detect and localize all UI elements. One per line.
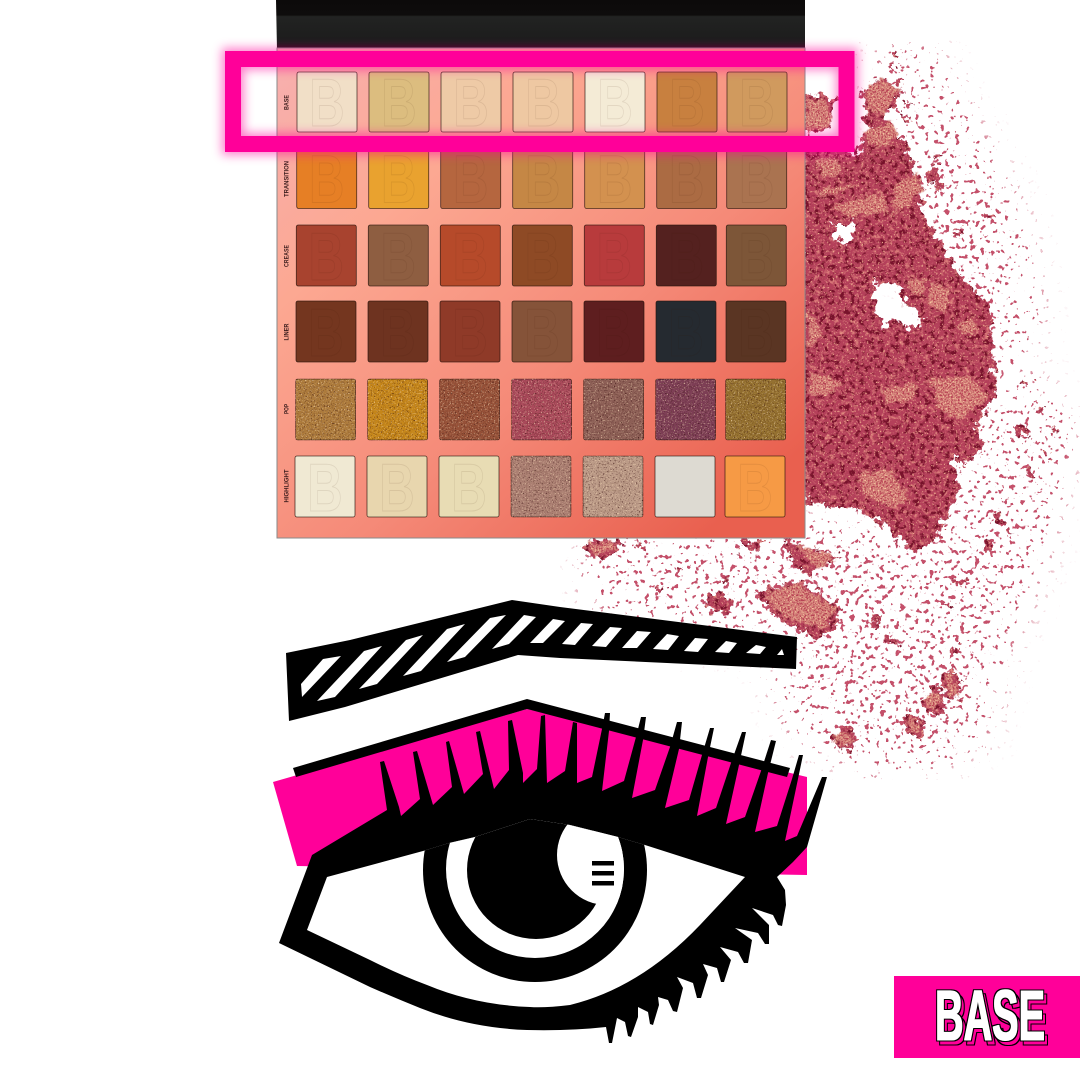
swatch row: highlight: B xyxy=(451,449,487,526)
swatch row: transition: B xyxy=(739,141,774,217)
row label: liner: LINER xyxy=(284,323,290,340)
swatch row: highlight: B xyxy=(737,449,773,526)
eye illustration xyxy=(273,699,827,1043)
row label: pop: POP xyxy=(284,404,290,414)
palette lid xyxy=(276,0,805,50)
swatch row: transition xyxy=(297,141,787,217)
row label: crease: CREASE xyxy=(284,244,290,267)
swatch row: base: B xyxy=(381,64,417,141)
swatch row: pop: B xyxy=(668,372,703,449)
swatch row: crease: B xyxy=(739,218,774,295)
swatch row: liner xyxy=(296,294,786,371)
swatch row: crease: B xyxy=(453,218,488,295)
swatch row: highlight: B xyxy=(379,449,415,526)
swatch row: pop: B xyxy=(738,372,773,449)
swatch row: crease: B xyxy=(597,218,632,295)
three-line catchlight xyxy=(592,861,614,886)
shiny powder shards xyxy=(588,78,990,746)
swatch row: pop: B xyxy=(380,372,415,449)
swatch row: transition: B xyxy=(381,141,416,217)
row label: highlight: HIGHLIGHT xyxy=(284,469,290,502)
neon highlight frame around base row xyxy=(233,59,847,144)
swatch row: base: B xyxy=(739,64,775,141)
swatch row: liner: B xyxy=(738,294,774,371)
swatch row: highlight: B xyxy=(307,449,343,526)
row label: transition: TRANSITION xyxy=(284,161,290,197)
swatch row: transition: B xyxy=(525,141,560,217)
swatch row: crease: B xyxy=(309,218,344,295)
swatch row: base xyxy=(297,64,787,141)
row label: base: BASE xyxy=(284,94,290,110)
swatch row: liner: B xyxy=(380,294,416,371)
sclera xyxy=(307,819,745,1007)
swatch row: base: B xyxy=(597,64,633,141)
lashes and eye outline xyxy=(279,713,827,1043)
swatch row: crease: B xyxy=(381,218,416,295)
swatch row: transition: B xyxy=(669,141,704,217)
swatch row: pop: B xyxy=(308,372,343,449)
swatch row: liner: B xyxy=(524,294,560,371)
swatch row: crease: B xyxy=(669,218,704,295)
swatch row: liner: B xyxy=(452,294,488,371)
palette tray xyxy=(277,48,805,538)
swatch row: highlight: B xyxy=(595,449,631,526)
label badge xyxy=(894,976,1080,1058)
iris and pupil xyxy=(423,819,647,982)
swatch row: liner: B xyxy=(308,294,344,371)
swatch row: pop xyxy=(296,372,786,449)
crushed eyeshadow mass xyxy=(585,50,1058,750)
swatch row: highlight xyxy=(295,449,785,526)
swatch row: liner: B xyxy=(596,294,632,371)
swatch row: base: B xyxy=(669,64,705,141)
upper crease line xyxy=(293,699,790,777)
swatch row: base: B xyxy=(525,64,561,141)
swatch row: transition: B xyxy=(453,141,488,217)
scattered powder crumbs xyxy=(590,50,1065,765)
pink eyeshadow band xyxy=(273,709,807,875)
swatch row: pop: B xyxy=(524,372,559,449)
swatch row: highlight: B xyxy=(523,449,559,526)
swatch row: base: B xyxy=(453,64,489,141)
swatch row: base: B xyxy=(309,64,345,141)
swatch row: transition: B xyxy=(597,141,632,217)
swatch row: pop: B xyxy=(596,372,631,449)
swatch row: liner: B xyxy=(668,294,704,371)
eyeshadow palette xyxy=(276,0,805,538)
infographic canvas xyxy=(215,0,1080,1058)
swatch row: crease xyxy=(296,218,786,295)
eyebrow xyxy=(286,600,797,721)
swatch row: crease: B xyxy=(525,218,560,295)
swatch row: pop: B xyxy=(452,372,487,449)
swatch row: transition: B xyxy=(309,141,344,217)
